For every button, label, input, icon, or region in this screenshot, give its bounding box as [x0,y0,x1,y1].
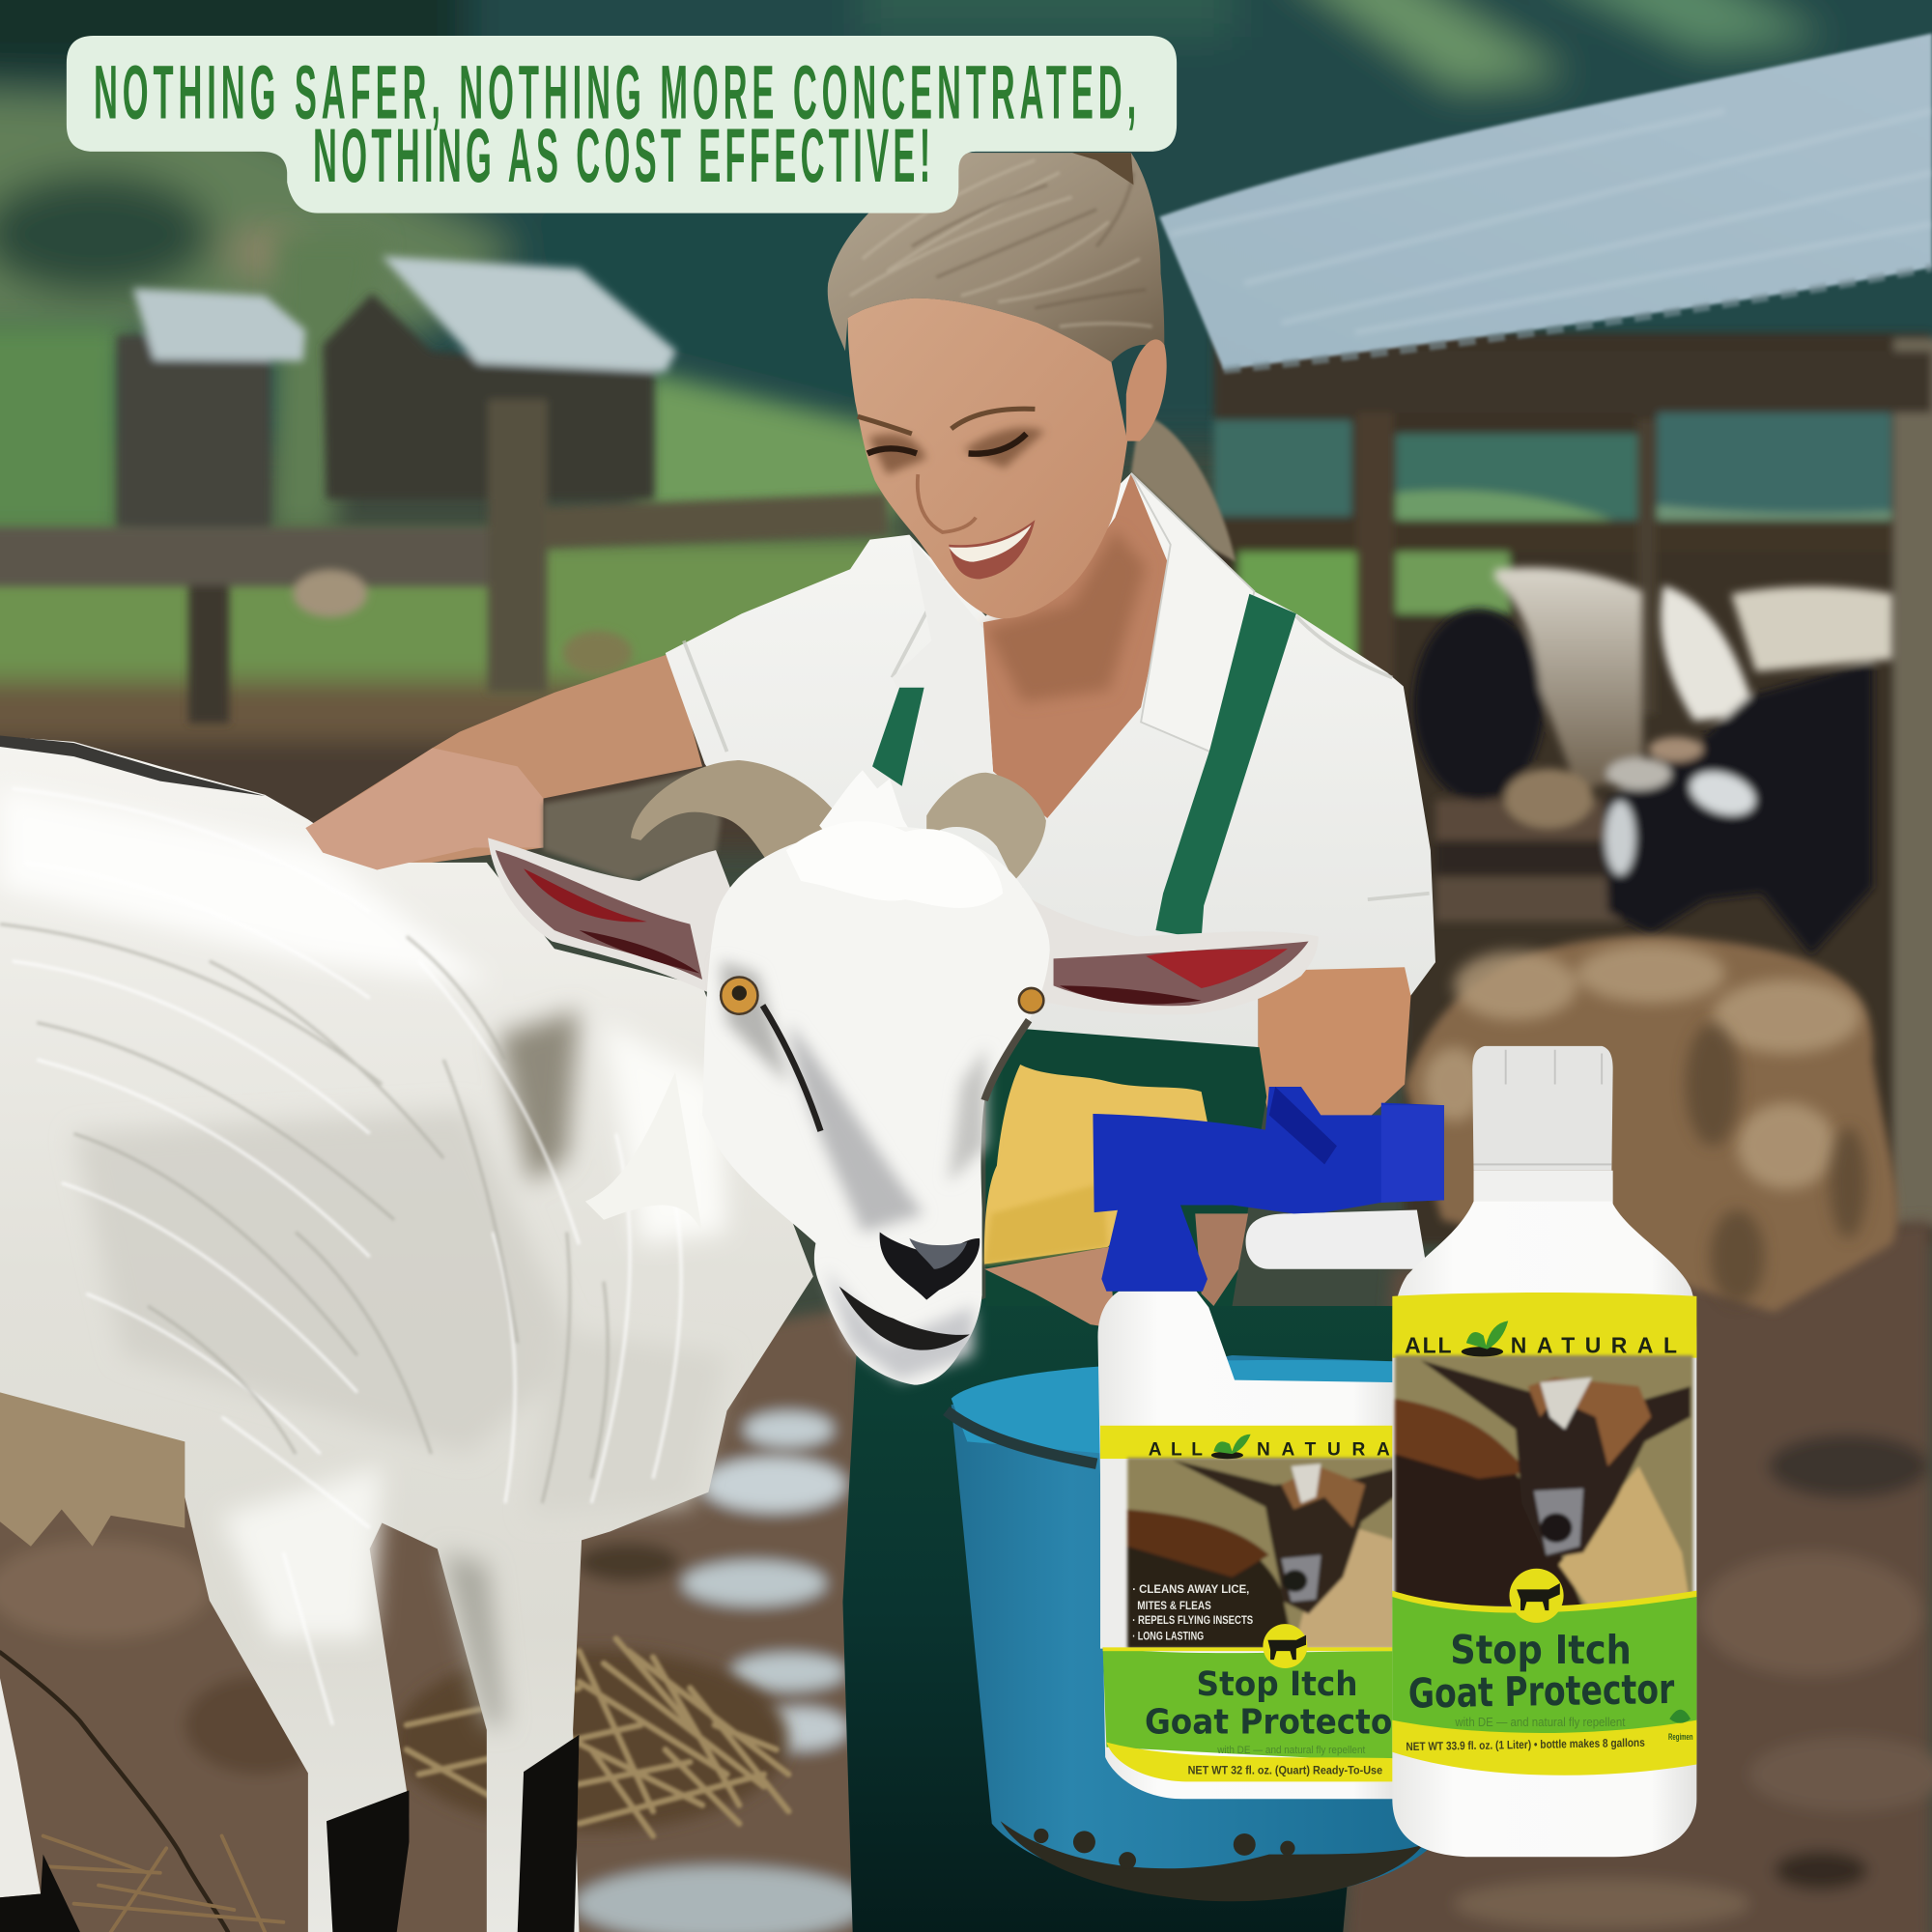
goat eyes [721,977,1043,1014]
bottle text: with DE — and natural fly repellent [1454,1715,1626,1729]
beard tuft [585,1072,702,1233]
apron bib lower [985,1029,1266,1306]
jug yellow band [1106,1743,1395,1781]
jug text: with DE — and natural fly repellent [1216,1745,1366,1756]
black hooves [327,1735,579,1932]
left ear [488,838,739,993]
jug goat badge [1263,1624,1307,1668]
jug text: Stop Itch [1197,1665,1358,1704]
bottle text: Regimen [1668,1732,1693,1742]
jug text: Goat Protecto [1145,1703,1392,1743]
apron lower [842,1282,1392,1932]
bottle text: Stop Itch [1450,1627,1632,1673]
face [848,298,1127,618]
blue sprayer head [1093,1087,1444,1292]
bottle text: Goat Protector [1407,1665,1675,1718]
jug handle [1246,1210,1427,1269]
hair crest along spine [0,735,265,796]
blue bucket [947,1355,1430,1901]
goat nose and mouth [839,1233,980,1350]
background gap between arm and ear [543,770,721,881]
right horn [926,773,1046,881]
forelock [786,821,1003,908]
bottle body [1392,1202,1696,1857]
jug text: NATURA [1257,1439,1390,1460]
jug green band [1103,1647,1395,1762]
jug text: · LONG LASTING [1132,1630,1204,1643]
product: hose-end sprayer jug [1093,1087,1444,1799]
cows in pen [1413,567,1892,955]
straw on the ground [0,1638,788,1932]
hand on goat [305,748,543,870]
jug text: NET WT 32 fl. oz. (Quart) Ready-To-Use [1188,1764,1382,1777]
apron straps [872,594,1296,939]
hair strands [850,160,1152,327]
hair back wisps [1131,412,1236,562]
neck shadow [985,529,1146,702]
product: concentrate bottle [1392,1046,1696,1857]
bottle text: NET WT 33.9 fl. oz. (1 Liter) • bottle makes 8 gallons [1406,1736,1645,1753]
left horn [631,760,844,864]
bottle goat badge [1509,1569,1564,1623]
left collar [892,535,993,788]
muddy ground [0,1220,1932,1932]
headline line 1: NOTHING SAFER, NOTHING MORE CONCENTRATED, [94,49,1136,134]
eye sockets shadow [868,428,1045,474]
jug text: · CLEANS AWAY LICE, [1132,1582,1249,1596]
upper tuft [819,770,918,863]
tan belly fur [0,1380,185,1547]
hair bun [1072,153,1133,185]
right ear [1008,885,1319,1014]
right collar [1131,473,1254,752]
ear [1126,339,1167,441]
eyes and mouth [858,409,1035,579]
headline line 2: NOTHING AS COST EFFECTIVE! [313,113,930,198]
jug text: ALL [1149,1439,1203,1460]
face shading [721,961,985,1380]
jug text: MITES & FLEAS [1137,1599,1211,1612]
left arm reaching to goat [305,653,702,870]
jug text: · REPELS FLYING INSECTS [1132,1613,1253,1627]
goat head [702,827,1050,1385]
bottle yellow top band [1392,1293,1696,1358]
sponge [984,1065,1208,1264]
hand holding sponge [984,1247,1115,1328]
neck and chest [983,473,1171,818]
woman washing the goat [305,153,1435,1932]
shirt [666,473,1435,1047]
hair [828,153,1164,362]
white goat [0,735,1319,1932]
jug label bands [1100,1426,1395,1459]
bottle cap [1472,1046,1613,1171]
bottle label photo [1395,1355,1693,1608]
bottle yellow bottom band [1392,1720,1696,1776]
jug label photo [1127,1458,1395,1649]
bottle green band [1392,1593,1696,1736]
bottle text: ALL [1405,1333,1452,1358]
bottle text: NATURAL [1511,1333,1677,1358]
jug text [1132,1435,1392,1777]
black eye stripes [763,1006,1029,1131]
fur strands [13,788,681,1725]
right arm [1258,955,1410,1119]
far leg [0,1678,80,1932]
jug body [1097,1292,1399,1799]
bottle text [1405,1321,1693,1753]
hay bale behind bottle [1405,936,1898,1312]
goat body [0,735,813,1932]
hand fingers near sprayer [1195,1213,1248,1306]
barn roof and shelter [1159,33,1932,1244]
headline banner [67,36,1177,213]
fur shadows [0,788,727,1725]
